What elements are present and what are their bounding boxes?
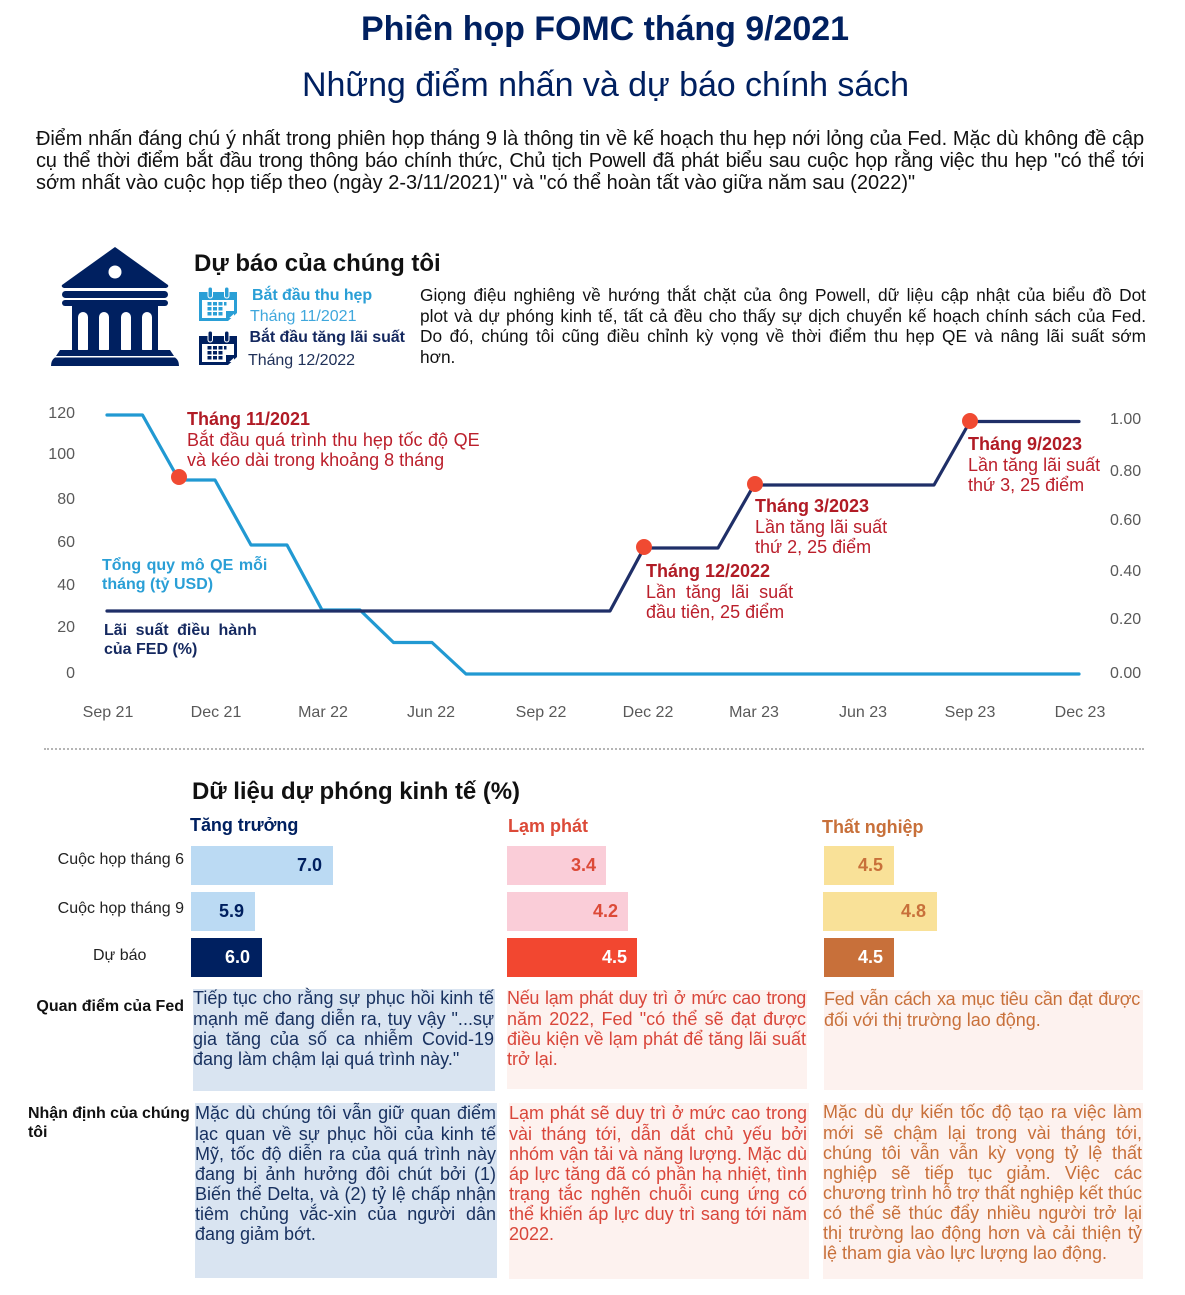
panel: our view on unemployment: chương trình hỗ trợ thất nghiệp kết thúc — [823, 1183, 1142, 1203]
panel: Fed view on growth: Tiếp tục cho rằng sự phục hồi kinh tế — [193, 988, 494, 1008]
panel: our view on growth — [195, 1103, 497, 1278]
panel: our view on unemployment: nghiệp sẽ tiếp tục giảm. Việc các — [823, 1163, 1142, 1183]
panel: our view on growth: đang bị ảnh hưởng đôi chút bởi (1) — [195, 1164, 496, 1184]
unemployment bars: 4.8 — [901, 901, 926, 921]
x axis labels: Jun 23 — [839, 704, 887, 721]
panel: our view on growth: Biến thể Delta, và (2) tỷ lệ chấp nhận — [195, 1184, 496, 1204]
right axis labels: 0.40 — [1110, 563, 1141, 580]
row label: September meeting: Cuộc họp tháng 9 — [58, 900, 184, 917]
growth bars: 6.0 — [225, 947, 250, 967]
left axis labels: 100 — [48, 446, 75, 463]
panel: our view on unemployment: mới sẽ chậm lại trong vài tháng tới, — [823, 1123, 1142, 1143]
panel: Fed view on unemployment — [824, 990, 1143, 1090]
left axis labels: 80 — [57, 491, 75, 508]
forecast description — [420, 285, 1146, 366]
right axis labels: 0.00 — [1110, 665, 1141, 682]
forecast description: plot và dự phóng kinh tế, tất cả đều cho thấy sự dịch chuyển kế hoạch chính sách của Fed. — [420, 306, 1146, 326]
title: Phiên họp FOMC tháng 9/2021 — [361, 10, 849, 48]
forecast description: hơn. — [420, 346, 455, 366]
right axis labels: 0.20 — [1110, 611, 1141, 628]
right axis labels: 1.00 — [1110, 411, 1141, 428]
legend: QE size: Tổng quy mô QE mỗi — [102, 557, 267, 574]
panel: our view on inflation: Lạm phát sẽ duy trì ở mức cao trong — [509, 1103, 807, 1123]
row label: our assessment: Nhận định của chúng — [28, 1105, 190, 1122]
intro text: Điểm nhấn đáng chú ý nhất trong phiên họp tháng 9 là thông tin về kế hoạch thu hẹp nới lỏng của Fed. Mặc dù không đề cập — [36, 128, 1144, 150]
panel: our view on unemployment: Mặc dù dự kiến tốc độ tạo ra việc làm — [823, 1102, 1142, 1122]
annotation: Sep 2023 — [968, 434, 1100, 495]
growth bars: 7.0 — [297, 855, 322, 875]
panel: our view on unemployment: lệ tham gia vào lực lượng lao động. — [823, 1243, 1107, 1263]
panel: our view on growth: lạc quan về sự phục hồi của kinh tế — [195, 1124, 496, 1144]
annotation: Mar 2023 — [755, 496, 887, 557]
panel: our view on inflation: trạng tắc nghẽn chuỗi cung ứng có — [509, 1184, 807, 1204]
annotation: Dec 2022 — [646, 561, 793, 622]
text: start of rate hikes — [248, 328, 405, 369]
text: start of tapering: Bắt đầu thu hẹp — [252, 287, 372, 304]
x axis labels: Mar 23 — [729, 704, 779, 721]
icon: central bank building — [51, 247, 179, 366]
panel: our view on unemployment: chúng tôi vẫn vẫn kỳ vọng tỷ lệ thất — [823, 1143, 1142, 1163]
row label: June meeting: Cuộc họp tháng 6 — [58, 851, 184, 868]
panel: our view on growth: đang giảm bớt. — [195, 1224, 316, 1244]
text: start of tapering: Tháng 11/2021 — [250, 308, 356, 325]
intro text: cụ thể thời điểm bắt đầu trong thông báo chính thức, Chủ tịch Powell đã phát biểu sau cuộc họp rằng việc thu hẹp "có thể tới — [36, 150, 1144, 172]
panel: our view on inflation — [509, 1103, 809, 1279]
x axis labels: Sep 22 — [516, 704, 566, 721]
legend: Fed rate: Lãi suất điều hành — [104, 622, 257, 639]
growth bars: 5.9 — [219, 901, 244, 921]
column heading: inflation: Lạm phát — [508, 816, 588, 836]
left axis labels — [48, 405, 75, 682]
annotation: Nov 2021: Tháng 11/2021 — [187, 409, 310, 429]
right axis labels — [1110, 411, 1141, 682]
left axis labels: 60 — [57, 534, 75, 551]
intro text: sớm nhất vào cuộc họp tiếp theo (ngày 2-3/11/2021)" và "có thể hoàn tất vào giữa năm sau (2022)" — [36, 172, 915, 194]
forecast description: Do đó, chúng tôi cũng điều chỉnh kỳ vọng về thời điểm thu hẹp QE và nâng lãi suất sớm — [420, 326, 1146, 346]
text: start of tapering — [250, 286, 372, 325]
x axis labels: Dec 21 — [191, 704, 241, 721]
panel: Fed view on unemployment: Fed vẫn cách xa mục tiêu cần đạt được — [824, 989, 1140, 1009]
panel: Fed view on growth — [193, 989, 495, 1091]
annotation: Mar 2023: Lần tăng lãi suất — [755, 516, 887, 536]
x axis labels: Dec 22 — [623, 704, 673, 721]
panel: our view on unemployment — [823, 1103, 1143, 1279]
row label: Fed view: Quan điểm của Fed — [36, 998, 184, 1015]
panel: our view on growth: Mặc dù chúng tôi vẫn giữ quan điểm — [195, 1103, 496, 1123]
intro text — [36, 128, 1144, 194]
panel: Fed view on inflation: Nếu lạm phát duy trì ở mức cao trong — [507, 988, 806, 1008]
unemployment bars: 4.5 — [858, 855, 883, 875]
column heading: unemployment: Thất nghiệp — [822, 817, 923, 837]
subtitle: Những điểm nhấn và dự báo chính sách — [302, 66, 909, 104]
icon: navy calendar — [199, 332, 237, 365]
panel: our view on inflation: áp lực tăng đã có phần hạ nhiệt, tình — [509, 1164, 807, 1184]
x axis labels: Sep 21 — [83, 704, 133, 721]
legend: QE size — [102, 556, 267, 592]
annotation: Mar 2023: Tháng 3/2023 — [755, 496, 869, 516]
row label: our assessment — [28, 1105, 190, 1140]
annotation: Nov 2021: Bắt đầu quá trình thu hẹp tốc độ QE — [187, 430, 480, 450]
annotation: Nov 2021 — [187, 409, 480, 470]
annotation: Dec 2022: Tháng 12/2022 — [646, 561, 770, 581]
x axis labels — [83, 704, 1105, 721]
annotation: Sep 2023: Lần tăng lãi suất — [968, 454, 1100, 474]
left axis labels: 40 — [57, 577, 75, 594]
left axis labels: 0 — [66, 665, 75, 682]
legend: Fed rate — [104, 622, 257, 658]
panel: Fed view on growth: đang làm chậm lại quá trình này." — [193, 1049, 459, 1069]
annotation: Nov 2021: và kéo dài trong khoảng 8 tháng — [187, 450, 444, 470]
unemployment bars — [823, 846, 937, 977]
panel: our view on inflation: thể khiến áp lực duy trì sang tới năm — [509, 1204, 807, 1224]
legend: QE size: tháng (tỷ USD) — [102, 576, 213, 592]
x axis labels: Sep 23 — [945, 704, 995, 721]
rate line — [107, 422, 1079, 611]
markers — [171, 413, 978, 555]
panel: our view on unemployment: có thể sẽ thúc đẩy nhiều người trở lại — [823, 1203, 1142, 1223]
growth bars — [191, 846, 333, 977]
text: start of rate hikes: Tháng 12/2022 — [248, 352, 355, 369]
annotation: Sep 2023: Tháng 9/2023 — [968, 434, 1082, 454]
annotation: Dec 2022: đầu tiên, 25 điểm — [646, 602, 784, 622]
text: start of rate hikes: Bắt đầu tăng lãi suất — [250, 329, 405, 346]
right axis labels: 0.80 — [1110, 463, 1141, 480]
left axis labels: 120 — [48, 405, 75, 422]
unemployment bars: 4.5 — [858, 947, 883, 967]
panel: our view on unemployment: thị trường lao động hơn và cải thiện tỷ — [823, 1223, 1142, 1243]
panel: Fed view on inflation: năm 2022, Fed "có thể sẽ đạt được — [507, 1009, 806, 1029]
annotation: Sep 2023: thứ 3, 25 điểm — [968, 475, 1084, 495]
panel: our view on inflation: 2022. — [509, 1224, 554, 1244]
inflation bars: 4.2 — [593, 901, 618, 921]
heading: economic projections: Dữ liệu dự phóng kinh tế (%) — [192, 778, 520, 805]
panel: our view on growth: Mỹ, tốc độ diễn ra của quá trình này — [195, 1144, 496, 1164]
panel: our view on inflation: nhóm vận tải và năng lượng. Mặc dù — [509, 1144, 807, 1164]
panel: Fed view on inflation: trở lại. — [507, 1049, 558, 1069]
right axis labels: 0.60 — [1110, 512, 1141, 529]
annotation: Mar 2023: thứ 2, 25 điểm — [755, 537, 871, 557]
panel: our view on growth: tiêm chủng vắc-xin của người dân — [195, 1204, 496, 1224]
row label: forecast: Dự báo — [93, 947, 146, 964]
x axis labels: Jun 22 — [407, 704, 455, 721]
QE line — [107, 415, 1079, 674]
panel: Fed view on growth: gia tăng của số ca nhiễm Covid-19 — [193, 1029, 494, 1049]
left axis labels: 20 — [57, 619, 75, 636]
panel: Fed view on inflation: điều kiện về lạm phát để tăng lãi suất — [507, 1029, 806, 1049]
annotation: Dec 2022: Lần tăng lãi suất — [646, 582, 793, 602]
forecast description: Giọng điệu nghiêng về hướng thắt chặt của ông Powell, dữ liệu cập nhật của biểu đồ Dot — [420, 285, 1146, 305]
panel: Fed view on inflation — [507, 990, 807, 1089]
inflation bars: 3.4 — [571, 855, 596, 875]
column heading: growth: Tăng trưởng — [190, 815, 298, 835]
x axis labels: Dec 23 — [1055, 704, 1105, 721]
panel: our view on inflation: vài tháng tới, dẫn dắt chủ yếu bởi — [509, 1124, 807, 1144]
heading: our forecast: Dự báo của chúng tôi — [194, 250, 441, 277]
panel: Fed view on growth: mạnh mẽ đang diễn ra, tuy vậy "...sự — [193, 1009, 494, 1029]
line chart: QE size and Fed funds rate — [48, 405, 1141, 721]
x axis labels: Mar 22 — [298, 704, 348, 721]
icon: blue calendar — [199, 288, 237, 321]
inflation bars: 4.5 — [602, 947, 627, 967]
row label: our assessment: tôi — [28, 1124, 47, 1140]
inflation bars — [507, 846, 637, 977]
panel: Fed view on unemployment: đối với thị trường lao động. — [824, 1010, 1041, 1030]
legend: Fed rate: của FED (%) — [104, 640, 197, 658]
